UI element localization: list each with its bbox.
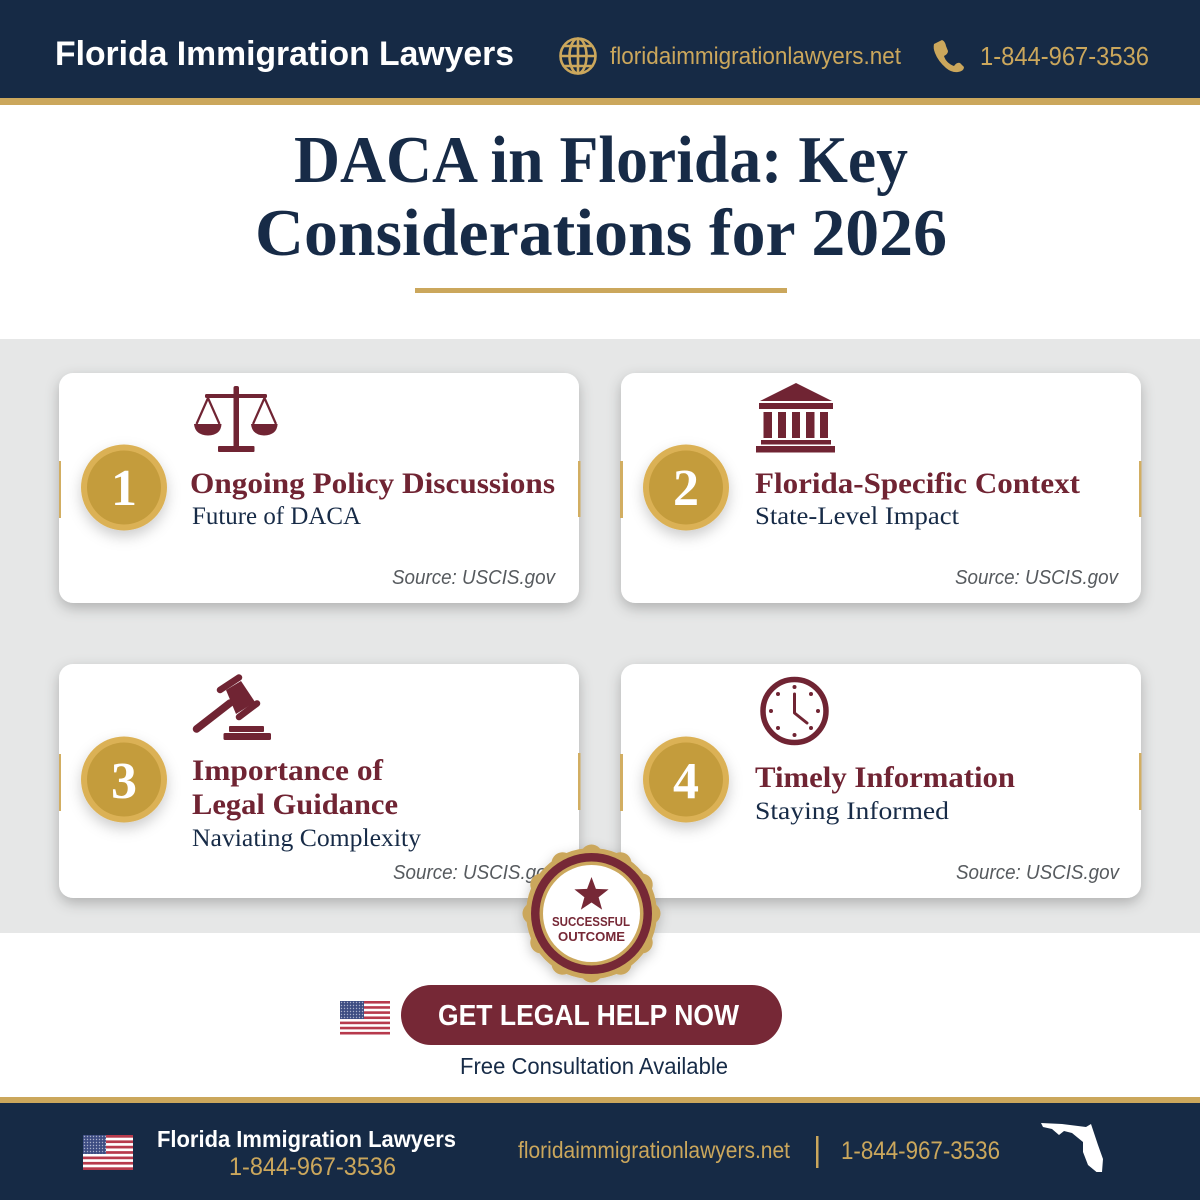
panel: card 1 — [59, 373, 580, 603]
card 4 source: Source: USCIS.gov — [956, 862, 1120, 884]
title underline — [415, 288, 787, 293]
number badge 1 — [81, 444, 167, 530]
card 1 heading: Ongoing Policy Discussions — [190, 467, 555, 500]
icon: gavel — [196, 678, 271, 740]
icon: clock — [763, 680, 826, 742]
number badge 4: 4 — [673, 753, 699, 810]
footer brand name: Florida Immigration Lawyers — [157, 1126, 456, 1152]
number badge 4 — [643, 736, 729, 822]
panel: card 3 — [59, 664, 580, 898]
call to action button — [401, 985, 782, 1045]
card 3 heading: Importance of — [192, 754, 384, 787]
number badge 2: 2 — [673, 460, 699, 517]
free consultation note: Free Consultation Available — [460, 1053, 728, 1079]
number badge 2 — [643, 444, 729, 530]
card 2 source: Source: USCIS.gov — [955, 567, 1119, 589]
card 1 subheading: Future of DACA — [192, 503, 361, 530]
footer phone number right: 1-844-967-3536 — [841, 1137, 1000, 1165]
seal: successful outcome — [522, 844, 660, 982]
icon: scales of justice — [194, 386, 278, 452]
icon: globe — [560, 38, 596, 74]
title: DACA in Florida: Key — [294, 123, 908, 197]
seal text: OUTCOME — [558, 929, 625, 944]
card 2 heading: Florida-Specific Context — [755, 467, 1080, 500]
number badge 3: 3 — [111, 753, 137, 810]
seal text — [552, 914, 630, 944]
icon: phone — [934, 40, 964, 72]
grey content band — [0, 339, 1200, 933]
card 4 heading: Timely Information — [755, 761, 1015, 794]
card 3 subheading: Naviating Complexity — [192, 825, 422, 852]
footer website: floridaimmigrationlawyers.net — [518, 1137, 791, 1163]
header phone number: 1-844-967-3536 — [980, 41, 1149, 71]
card 3 heading — [192, 754, 398, 821]
seal text: SUCCESSFUL — [552, 914, 630, 929]
card 3 heading: Legal Guidance — [192, 788, 398, 821]
panel: card 4 — [620, 664, 1142, 898]
number badge 3 — [81, 736, 167, 822]
card 1 source: Source: USCIS.gov — [392, 567, 556, 589]
panel: card 2 — [620, 373, 1142, 603]
icon: US flag (footer) — [83, 1135, 133, 1170]
header bar — [0, 0, 1200, 105]
icon: Florida silhouette — [1041, 1123, 1103, 1172]
title — [255, 123, 947, 270]
number badge 1: 1 — [111, 460, 137, 517]
card 4 subheading: Staying Informed — [755, 798, 950, 825]
title: Considerations for 2026 — [255, 196, 947, 270]
card 2 subheading: State-Level Impact — [755, 503, 959, 530]
header brand name: Florida Immigration Lawyers — [55, 35, 514, 73]
icon: courthouse — [756, 383, 835, 452]
seal star — [574, 877, 609, 910]
icon: US flag (call to action) — [340, 1001, 390, 1034]
footer phone number: 1-844-967-3536 — [229, 1153, 396, 1181]
card 3 source: Source: USCIS.gov — [393, 862, 557, 884]
header website: floridaimmigrationlawyers.net — [610, 43, 901, 70]
footer bar — [0, 1097, 1200, 1200]
call to action button: GET LEGAL HELP NOW — [438, 1000, 740, 1032]
